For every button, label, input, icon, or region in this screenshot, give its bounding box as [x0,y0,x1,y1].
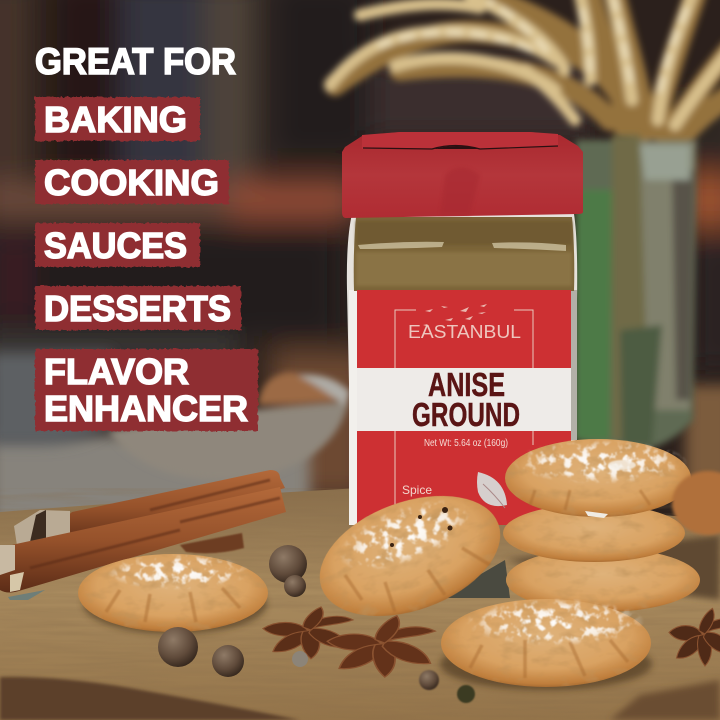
wooden table [0,488,720,720]
leaf icon [477,472,507,508]
product name: GROUND [412,396,520,433]
product name: ANISE [428,366,505,403]
tag: desserts: DESSERTS [44,288,231,329]
jar body [347,214,577,598]
red label [357,290,571,525]
tag: sauces: SAUCES [44,225,187,266]
bottom cookie [506,548,700,612]
glass vase with stems [574,135,697,451]
centre cookie [303,473,517,639]
star anise pods [263,607,720,677]
spice mix text: Spice [402,483,432,497]
white product band [357,368,571,431]
ground anise powder [354,217,574,291]
tag: cooking: COOKING [44,162,219,203]
wheat light spikes [330,0,720,125]
left cookie [78,554,268,634]
allspice peppercorns [158,545,475,703]
wheat dark underlayer [335,0,720,140]
front cookie [440,598,652,690]
brand logo birds [423,304,487,326]
product name [412,366,520,433]
stacked cookies [503,439,700,612]
tag: flavor enhancer [35,349,258,431]
far right cookie [672,471,720,535]
label frame [395,310,533,520]
background bowl [108,372,350,480]
product jar [342,132,583,598]
wheat bouquet [330,0,720,140]
tag: flavor enhancer: FLAVOR [44,351,189,392]
heading: GREAT FOR [35,41,236,82]
brand name: EASTANBUL [408,321,521,342]
top cookie [505,439,691,518]
left grey bowl [0,352,112,445]
tag: flavor enhancer: ENHANCER [44,388,248,429]
red lid [342,132,583,218]
net weight: Net Wt: 5.64 oz (160g) [424,437,508,449]
middle cookie [503,504,685,562]
tag: baking: BAKING [44,99,187,140]
cinnamon sticks [0,470,286,600]
